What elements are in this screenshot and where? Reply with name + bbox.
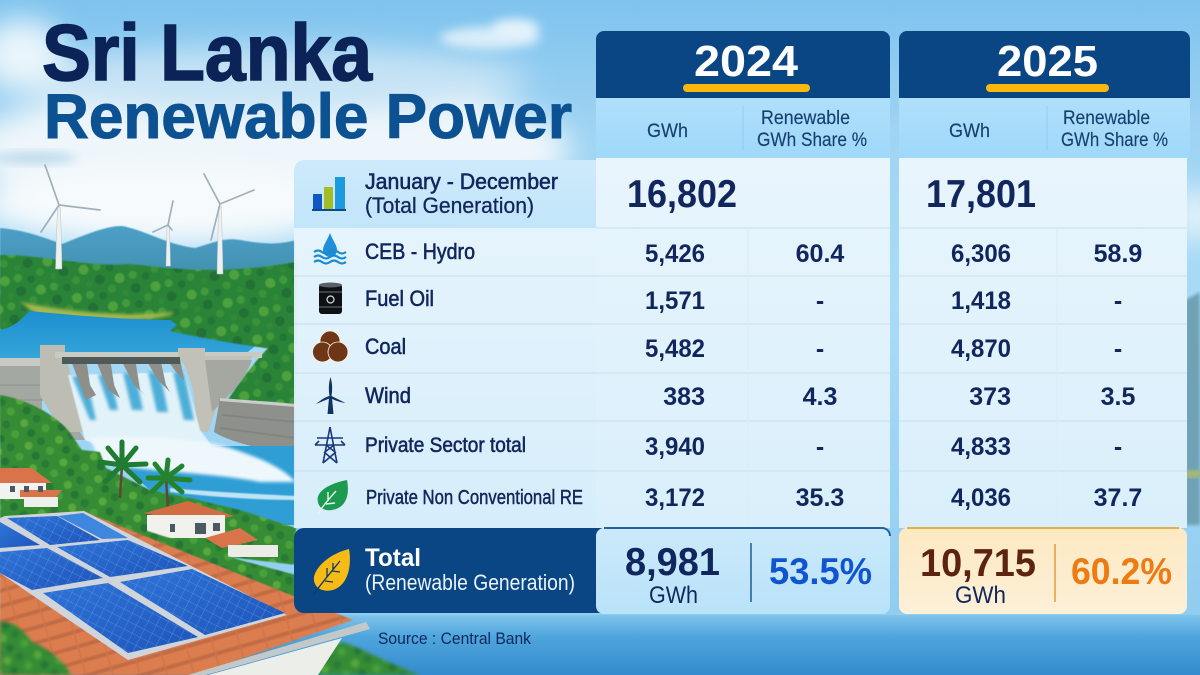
right forested hill [170,272,296,352]
palm trees [120,465,168,510]
left island [0,298,38,329]
foliage under roof edge [90,512,296,640]
bottom right greenery [316,642,420,675]
lake [0,311,258,358]
total box 2025 [899,528,1187,614]
values 2025: - [1114,335,1122,363]
dam structure [0,358,85,440]
icon: coal [312,331,348,362]
year header 2025: 2025 [997,37,1098,86]
values 2025: 4,833 [951,433,1011,461]
far green hills [0,255,296,330]
values 2025: - [1114,433,1122,461]
source note: Source : Central Bank [378,630,532,648]
photo scene: wind turbines, hydro dam, houses and solar roof [0,165,420,675]
column headers 2025: GWh [949,121,990,142]
waterfall [68,372,215,450]
house right [144,501,234,524]
label: CEB - Hydro: CEB - Hydro [365,239,475,264]
values 2024: 35.3 [796,484,844,512]
total box 2024: 53.5% [769,551,872,592]
solar panels [0,511,287,660]
icon: water drop and waves [314,233,346,264]
label: January - December: (Total Generation) [365,193,534,218]
year header 2024: 2024 [694,37,799,86]
values 2024: 3,940 [645,433,705,461]
label: Coal: Coal [365,334,406,359]
values 2025: - [1114,287,1122,315]
values 2025: 6,306 [951,240,1011,268]
icon: yellow leaf [313,549,350,595]
values 2024: 1,571 [645,287,705,315]
values 2025: 37.7 [1094,484,1142,512]
total box 2024 [596,528,890,614]
total row label [294,528,602,613]
mountains [0,226,296,300]
values 2025 [899,158,1187,528]
values 2024: - [816,287,824,315]
near forest [0,395,296,565]
total box 2025: GWh [955,582,1006,609]
near left plant [0,622,72,675]
table panel: row labels [294,160,600,528]
values 2024: 3,172 [645,484,705,512]
column headers 2024: GWh Share % [757,130,867,151]
year header 2025 [899,31,1190,98]
label: Wind: Wind [365,383,411,408]
icon: wind turbine [316,377,346,414]
total box 2024: 8,981 [625,541,720,584]
values 2024 [596,158,890,528]
total box 2025: 10,715 [920,542,1036,585]
label: January - December [365,169,558,218]
values 2024: 5,482 [645,335,705,363]
icon: transmission tower [315,427,345,463]
right edge landscape [1185,292,1200,525]
values 2024: 60.4 [796,240,844,268]
values 2025: 373 [969,383,1011,411]
total row label: Total [365,544,421,572]
values 2025: 1,418 [951,287,1011,315]
column: 2024 [596,31,890,528]
values 2024: - [816,433,824,461]
total box 2025: 60.2% [1071,551,1172,592]
gutter and wall [208,638,342,675]
column headers 2025: Renewable [1063,108,1150,129]
icon: oil barrel [319,282,342,314]
column headers 2024: GWh [647,121,688,142]
total box 2024: GWh [649,582,698,609]
wind turbines [41,165,254,274]
column headers 2024: Renewable [761,108,850,129]
values 2025: 4,870 [951,335,1011,363]
column headers 2024 [596,98,890,158]
column headers 2025: GWh Share % [1061,130,1168,151]
values 2024: 4.3 [803,383,837,411]
values 2025: 58.9 [1094,240,1142,268]
label: Private Sector total: Private Sector total [365,434,526,457]
column: 2025 [899,31,1190,528]
title: Renewable Power [44,82,572,152]
values 2025: 4,036 [951,484,1011,512]
column headers 2025 [899,98,1190,158]
total row label: (Renewable Generation) [365,570,575,595]
values 2024: 16,802 [627,173,737,216]
title: Sri Lanka [42,8,372,97]
tiled roof [0,511,353,675]
label: Private Non Conventional RE: Private Non Conventional RE [366,487,583,509]
values 2025: 3.5 [1101,383,1135,411]
house left [0,468,52,483]
values 2024: 5,426 [645,240,705,268]
values 2025: 17,801 [926,173,1036,216]
label: Fuel Oil: Fuel Oil [365,286,434,311]
values 2024: - [816,335,824,363]
icon: bar chart [312,177,346,211]
river [100,446,296,525]
sunlit hill strip [20,302,175,320]
retaining wall [214,398,296,455]
year header 2024 [596,31,890,98]
title [42,8,572,152]
label: January - December: January - December [365,169,558,194]
icon: green leaf [318,480,348,514]
values 2024: 383 [663,383,705,411]
